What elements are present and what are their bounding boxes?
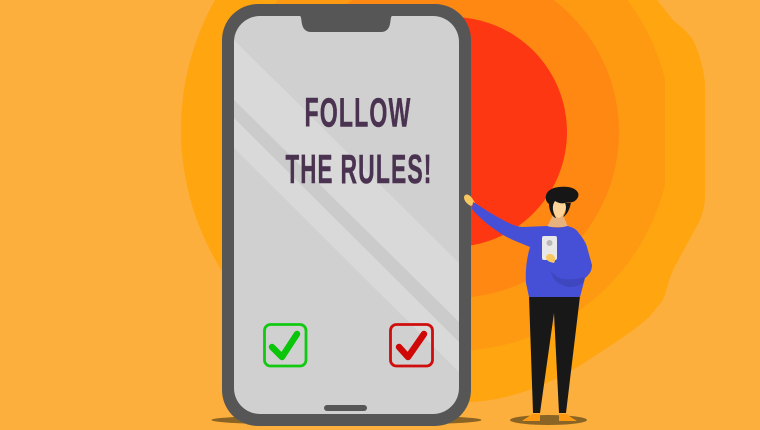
heading: FOLLOW <box>304 90 412 136</box>
heading: THE <box>286 146 334 192</box>
hand raised <box>464 194 475 206</box>
screen glare band <box>234 100 459 342</box>
person <box>464 187 592 425</box>
phone ground shadow <box>212 414 482 426</box>
phone body <box>222 4 471 426</box>
neck <box>547 215 568 227</box>
screen notch <box>298 14 394 32</box>
hand holding phone <box>546 254 555 263</box>
shoes <box>522 414 577 421</box>
icon: red check box <box>390 324 432 366</box>
face <box>552 200 566 218</box>
handheld phone camera <box>546 240 552 246</box>
person ground shadow <box>510 415 587 425</box>
illustration: follow the rules <box>181 0 705 426</box>
sweater <box>472 202 592 297</box>
hair <box>546 187 579 218</box>
icon: green check box <box>264 324 306 366</box>
trousers <box>529 296 580 413</box>
sweater fold <box>550 270 585 287</box>
smartphone <box>222 4 471 426</box>
home bar <box>324 405 367 411</box>
handheld phone <box>542 236 557 260</box>
screen glare <box>234 40 459 372</box>
heading <box>286 90 432 192</box>
phone screen <box>234 16 459 414</box>
concentric background circles <box>181 0 705 403</box>
heading: RULES! <box>340 146 432 192</box>
